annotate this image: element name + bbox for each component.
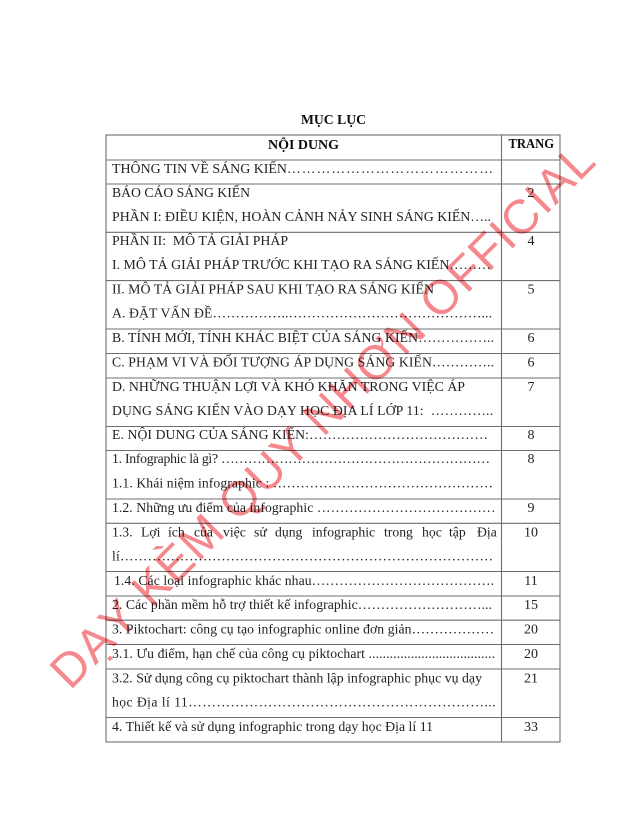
row: C: 6 — [528, 356, 534, 370]
row: 1.3: ích — [168, 524, 185, 540]
row: mô tả giải pháp sau: A. ĐẶT VẤN ĐỀ……………..……………………………………... — [112, 304, 492, 320]
table header: NỘI DUNG — [268, 136, 339, 152]
row: báo cáo, phần I: BÁO CÁO SÁNG KIẾN — [112, 184, 250, 200]
row: 1.2: 1.2. Những ưu điểm của infographic ………………………………… — [112, 500, 496, 515]
row: B: B. TÍNH MỚI, TÍNH KHÁC BIỆT CỦA SÁNG KIẾN…………….. — [112, 329, 494, 345]
row: E: 8 — [528, 428, 534, 443]
row: 4: 4. Thiết kế và sử dụng infographic trong dạy học Địa lí 11 — [112, 719, 433, 734]
row: E: E. NỘI DUNG CỦA SÁNG KIẾN:………………………………… — [112, 426, 488, 442]
row: 3.2: 3.2. Sử dụng công cụ piktochart thành lập infographic phục vụ dạy — [112, 670, 482, 686]
row: 1.4: 1.4. Các loại infographic khác nhau…………………………………. — [114, 573, 494, 588]
row: mô tả giải pháp sau: II. MÔ TẢ GIẢI PHÁP SAU KHI TẠO RA SÁNG KIẾN — [112, 280, 434, 296]
row: mô tả giải pháp sau: 5 — [528, 282, 534, 298]
row: C: C. PHẠM VI VÀ ĐỐI TƯỢNG ÁP DỤNG SÁNG KIẾN………….. — [112, 352, 494, 370]
table grid — [106, 135, 560, 742]
row: báo cáo, phần I — [112, 184, 534, 224]
row: 1.3: việc — [223, 524, 246, 540]
row: B: 6 — [528, 331, 534, 346]
row: 1.3 — [112, 524, 538, 564]
row: 1.4: 11 — [524, 574, 538, 589]
watermark: DẠY KÈM QUY NHƠN OFFICIAL — [40, 134, 605, 699]
row: mô tả giải pháp sau — [112, 280, 534, 320]
row: 1.3: Lợi — [141, 524, 161, 540]
row: 1.3: học — [422, 524, 442, 540]
row: phần II: I. MÔ TẢ GIẢI PHÁP TRƯỚC KHI TẠO RA SÁNG KIẾN……… — [112, 256, 491, 272]
row: 1.3: infographic — [312, 524, 375, 540]
row: thông tin về sáng kiến — [112, 160, 493, 176]
row: phần II: PHẦN II: MÔ TẢ GIẢI PHÁP — [112, 232, 288, 248]
row: thông tin về sáng kiến: THÔNG TIN VỀ SÁNG KIẾN — [112, 160, 287, 176]
row: 1: 1. Infographic là gì? …………………………………………………… — [112, 451, 490, 466]
table header — [268, 136, 554, 152]
row: 1.3: 10 — [524, 526, 538, 540]
row: 1.3: 1.3. — [112, 524, 133, 540]
row: 1.3: trong — [384, 524, 413, 540]
row: 1.3: lí……………………………………………………………………… — [112, 548, 493, 564]
row: 3: 3. Piktochart: công cụ tạo infographic online đơn giản……………… — [112, 622, 494, 636]
row: D: 7 — [528, 380, 534, 395]
row: 1.3: sử — [254, 524, 267, 540]
row: 1: 1.1. Khái niệm infographic : ………………………………………… — [112, 476, 493, 490]
row: 1 — [112, 451, 534, 490]
row: 3.1: 20 — [524, 647, 538, 662]
row: 3.1: 3.1. Ưu điểm, hạn chế của công cụ piktochart .................................... — [112, 646, 495, 661]
row: 3.2: 21 — [524, 672, 538, 686]
row: phần II — [112, 232, 534, 272]
row: 1.3: của — [194, 524, 213, 540]
row: 1.3: Địa — [477, 524, 497, 540]
row: 3.2 — [112, 670, 538, 710]
table header: TRANG — [508, 136, 554, 151]
title: MỤC LỤC — [301, 112, 366, 127]
row: D — [112, 378, 534, 418]
row: báo cáo, phần I: PHẦN I: ĐIỀU KIỆN, HOÀN CẢNH NẢY SINH SÁNG KIẾN….. — [112, 208, 491, 224]
row: 1.2: 9 — [528, 501, 534, 516]
row: thông tin về sáng kiến: …………………………………… — [287, 161, 493, 176]
row: 1.3: tập — [449, 524, 466, 540]
row: 4: 33 — [524, 720, 538, 735]
row: D: D. NHỮNG THUẬN LỢI VÀ KHÓ KHĂN TRONG VIỆC ÁP — [112, 378, 465, 394]
row: 2: 2. Các phần mềm hỗ trợ thiết kế infographic………………………... — [112, 597, 492, 612]
row: phần II: 4 — [528, 234, 534, 249]
row: 1: 8 — [528, 452, 534, 467]
row: báo cáo, phần I: 2 — [528, 186, 534, 201]
row: 3: 20 — [524, 622, 538, 638]
row: 1.3: dụng — [275, 524, 303, 540]
row: 4 — [112, 719, 538, 735]
row: D: DỤNG SÁNG KIẾN VÀO DẠY HỌC ĐỊA LÍ LỚP 11: ………….. — [112, 402, 493, 418]
row: 2: 15 — [524, 598, 538, 613]
row: 3.2: học Địa lí 11………………………………………………………... — [112, 694, 496, 710]
